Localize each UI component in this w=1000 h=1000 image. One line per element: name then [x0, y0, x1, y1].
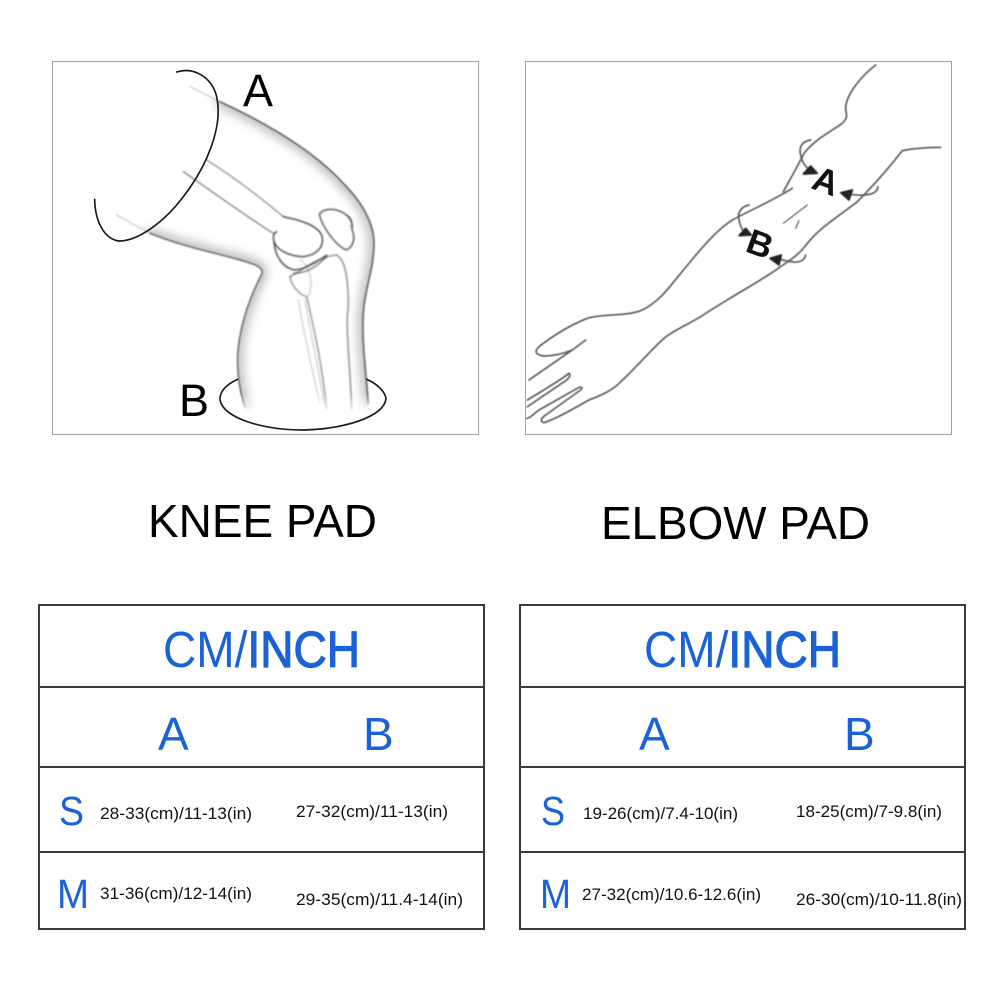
table: knee pad sizes [39, 605, 484, 929]
table header: unit: CM/INCH [644, 621, 841, 678]
table header: unit: CM/INCH [163, 621, 360, 678]
measure ring B [220, 379, 386, 430]
size S values: 18-25(cm)/7-9.8(in) [796, 802, 942, 821]
label B on arm: B [741, 222, 778, 267]
size S values [100, 802, 448, 823]
row label S: S [59, 788, 84, 834]
size M values [100, 884, 463, 909]
table: elbow pad sizes [520, 605, 965, 929]
row label S: S [541, 788, 565, 834]
row label M: M [57, 871, 89, 917]
column header B: B [363, 708, 394, 760]
illustration: arm outline [527, 65, 941, 423]
panel: knee diagram [52, 62, 478, 434]
size M values: 31-36(cm)/12-14(in) [100, 884, 252, 903]
size M values: 26-30(cm)/10-11.8(in) [796, 890, 962, 909]
row label M: M [540, 871, 571, 917]
size M values: 27-32(cm)/10.6-12.6(in) [582, 885, 761, 904]
label A on arm: A [807, 159, 844, 204]
label B: B [179, 375, 209, 426]
measure ring A [95, 71, 218, 241]
column header B: B [844, 708, 875, 760]
size M values: 29-35(cm)/11.4-14(in) [296, 890, 463, 909]
size S values: 28-33(cm)/11-13(in) [100, 804, 252, 823]
illustration: knee joint [95, 71, 386, 430]
panel: elbow diagram [526, 62, 952, 434]
column header A: A [639, 708, 670, 760]
heading: knee pad: KNEE PAD [148, 495, 377, 547]
size S values [583, 802, 942, 823]
size M values [582, 885, 962, 909]
column header A: A [158, 708, 189, 760]
size S values: 19-26(cm)/7.4-10(in) [583, 804, 738, 823]
heading: elbow pad: ELBOW PAD [601, 497, 870, 549]
size S values: 27-32(cm)/11-13(in) [296, 802, 448, 821]
label A: A [243, 65, 273, 116]
